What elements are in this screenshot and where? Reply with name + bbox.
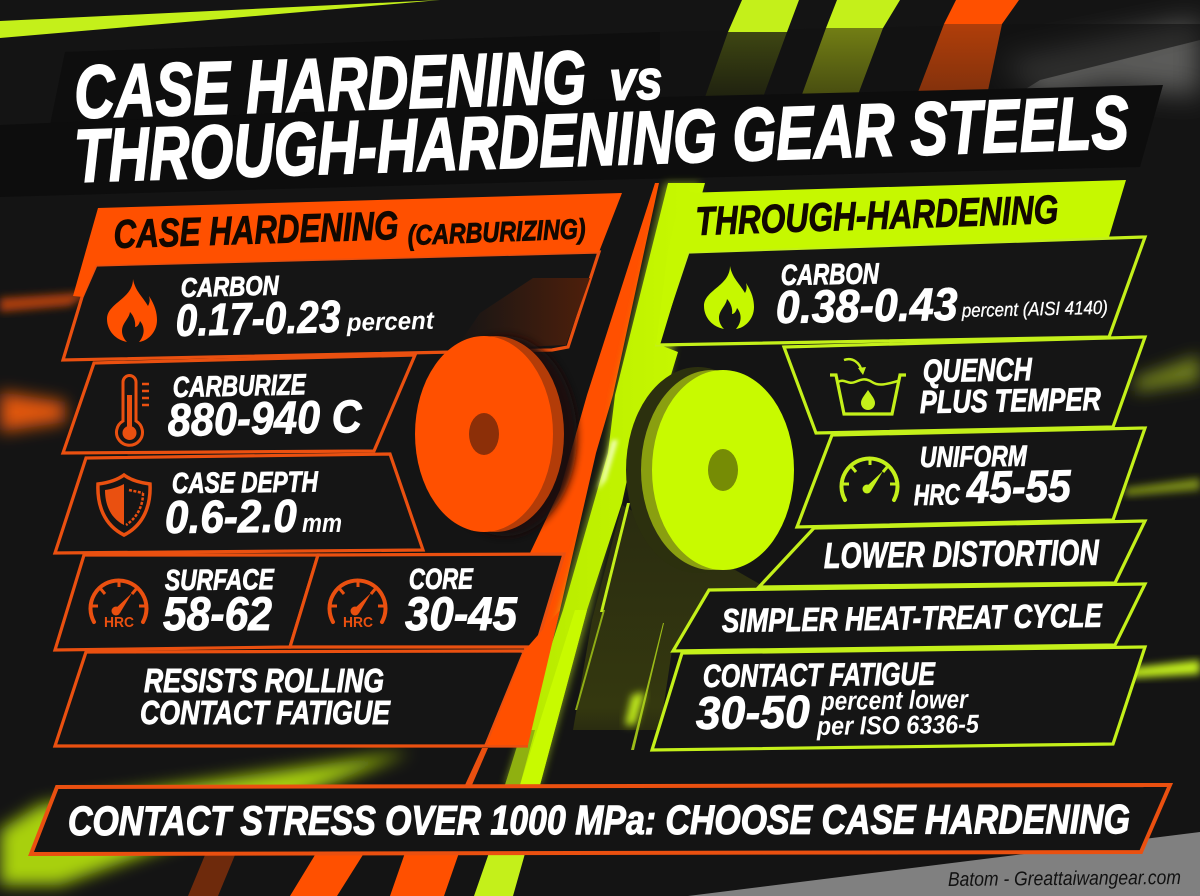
- text: simpler heat-treat cycle: SIMPLER HEAT-TREAT CYCLE: [722, 597, 1103, 639]
- text: hrc: HRC: [914, 479, 961, 512]
- grey corner wedge: [688, 832, 1200, 896]
- text: percent lower: percent lower: [820, 684, 970, 716]
- orange header: [73, 193, 622, 297]
- unit: percent: percent: [345, 307, 436, 337]
- lime gear disc: [626, 367, 794, 573]
- text: per iso 6336-5: per ISO 6336-5: [816, 709, 980, 741]
- top diagonal stripes: [704, 0, 1019, 100]
- centre orange band: [465, 183, 659, 785]
- text: quench: QUENCH: [922, 351, 1033, 389]
- icon: core gauge: HRC: [343, 615, 373, 631]
- icon: shield: [98, 475, 150, 535]
- icon: surface gauge: [90, 579, 146, 631]
- simpler cycle row panel: [673, 584, 1145, 651]
- quench row panel: [784, 337, 1145, 433]
- text: lower distortion: LOWER DISTORTION: [824, 532, 1100, 576]
- icon: core gauge: [330, 579, 386, 631]
- carbon row panel: [63, 252, 599, 360]
- title backing panels: [0, 32, 1163, 197]
- icon: surface gauge: HRC: [104, 615, 134, 631]
- contact fatigue row panel: [652, 647, 1145, 750]
- icon: uniform gauge: [842, 457, 898, 500]
- text: carbon: CARBON: [180, 270, 280, 303]
- resists row panel: [55, 651, 528, 746]
- panel: through-hardening: [652, 180, 1145, 750]
- text: contact fatigue: CONTACT FATIGUE: [703, 656, 936, 694]
- text: plus temper: PLUS TEMPER: [919, 381, 1101, 420]
- orange glow in carbon panel: [455, 278, 590, 350]
- lime header: [656, 180, 1126, 345]
- text: surface: SURFACE: [165, 564, 275, 597]
- carburize row panel: [63, 355, 415, 453]
- orange gear disc: [415, 336, 577, 536]
- heading: carburizing: (CARBURIZING): [407, 213, 586, 251]
- panel: case hardening: [55, 193, 622, 746]
- olive shaded area under lime disc: [573, 505, 770, 730]
- value: surface hardness: 58-62: [163, 587, 272, 640]
- unit: percent aisi 4140: percent (AISI 4140): [961, 298, 1108, 322]
- thin lime accents: [575, 503, 664, 750]
- banner: recommendation: [31, 785, 1170, 854]
- value: carbon percent: 0.38-0.43: [775, 278, 959, 333]
- unit: mm: mm: [302, 508, 342, 538]
- icon: quench tank: [830, 359, 906, 414]
- value: carburize temperature: 880-940 C: [167, 390, 363, 446]
- title line 1: CASE HARDENING: [73, 35, 587, 134]
- value: carbon percent: 0.17-0.23: [175, 291, 341, 346]
- core row panel: [290, 554, 564, 647]
- value: case depth: 0.6-2.0: [165, 490, 297, 543]
- title vs: vs: [608, 47, 663, 112]
- text: core: CORE: [409, 563, 474, 596]
- icon: flame: [704, 266, 754, 329]
- value: uniform hardness: 45-55: [965, 460, 1072, 513]
- value: fatigue percent: 30-50: [695, 685, 811, 739]
- centre lime band: [505, 183, 705, 785]
- icon: thermometer: [116, 376, 149, 445]
- text: carburize: CARBURIZE: [172, 369, 307, 404]
- value: core hardness: 30-45: [405, 587, 518, 640]
- title: [73, 35, 1130, 198]
- text: resists rolling: RESISTS ROLLING: [144, 662, 384, 699]
- text: uniform: UNIFORM: [920, 441, 1028, 474]
- text: case depth: CASE DEPTH: [172, 466, 319, 500]
- top left lime streak: [0, 0, 440, 38]
- icon: flame: [107, 279, 157, 342]
- surface row panel: [55, 555, 318, 650]
- lower distortion row panel: [759, 521, 1145, 587]
- carbon row panel: [657, 237, 1145, 345]
- title backing band: [60, 24, 1200, 120]
- heading: case hardening: CASE HARDENING: [113, 204, 399, 257]
- text: contact fatigue: CONTACT FATIGUE: [140, 694, 391, 731]
- bottom diagonal stripes: [188, 850, 526, 896]
- case depth row panel: [55, 454, 423, 553]
- text: carbon: CARBON: [781, 258, 880, 292]
- heading: through-hardening: THROUGH-HARDENING: [695, 188, 1059, 244]
- uniform row panel: [797, 428, 1145, 527]
